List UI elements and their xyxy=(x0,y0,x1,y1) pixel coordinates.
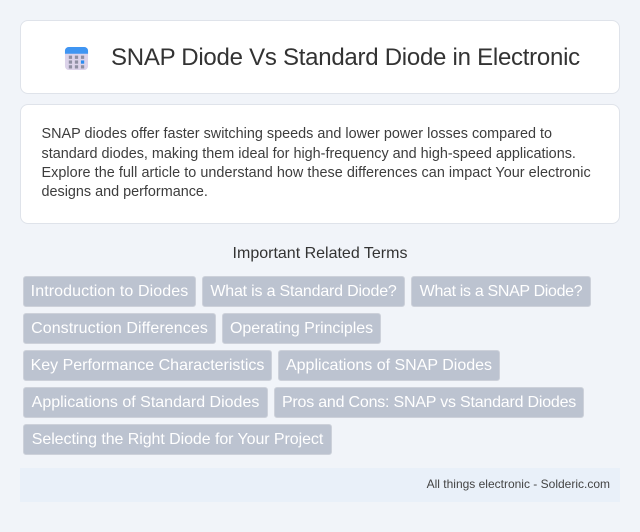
tag xyxy=(278,350,500,381)
tag xyxy=(411,276,591,307)
title: SNAP Diode Vs Standard Diode in Electronic xyxy=(111,44,580,71)
section heading: Important Related Terms xyxy=(233,245,407,262)
tag xyxy=(23,350,272,381)
tag: Construction Differences xyxy=(31,320,208,337)
tag xyxy=(23,313,216,344)
icon: calendar xyxy=(64,47,88,70)
intro text: designs and performance. xyxy=(42,184,208,200)
tag: Selecting the Right Diode for Your Project xyxy=(32,431,323,448)
tag: Introduction to Diodes xyxy=(31,283,188,300)
intro text: standard diodes, making them ideal for high-frequency and high-speed applications. xyxy=(42,146,576,162)
tag xyxy=(222,313,381,344)
tag: Operating Principles xyxy=(230,320,373,337)
tag xyxy=(23,387,268,418)
intro text xyxy=(42,126,591,200)
tag: Key Performance Characteristics xyxy=(31,357,264,374)
tag: Applications of Standard Diodes xyxy=(32,394,259,411)
tag xyxy=(274,387,584,418)
tag: What is a SNAP Diode? xyxy=(420,283,582,300)
tag xyxy=(202,276,405,307)
tag: What is a Standard Diode? xyxy=(210,283,397,300)
intro text: SNAP diodes offer faster switching speeds and lower power losses compared to xyxy=(42,126,552,142)
tag: Pros and Cons: SNAP vs Standard Diodes xyxy=(282,394,576,411)
footer bar xyxy=(20,468,620,502)
tag xyxy=(23,276,196,307)
footer text: All things electronic - Solderic.com xyxy=(427,477,610,491)
intro text panel xyxy=(20,104,620,224)
tag: Applications of SNAP Diodes xyxy=(286,357,492,374)
header panel xyxy=(20,20,620,94)
intro text: Explore the full article to understand how these differences can impact Your electronic xyxy=(42,165,591,181)
tag xyxy=(23,424,332,455)
related terms tags xyxy=(23,276,591,455)
